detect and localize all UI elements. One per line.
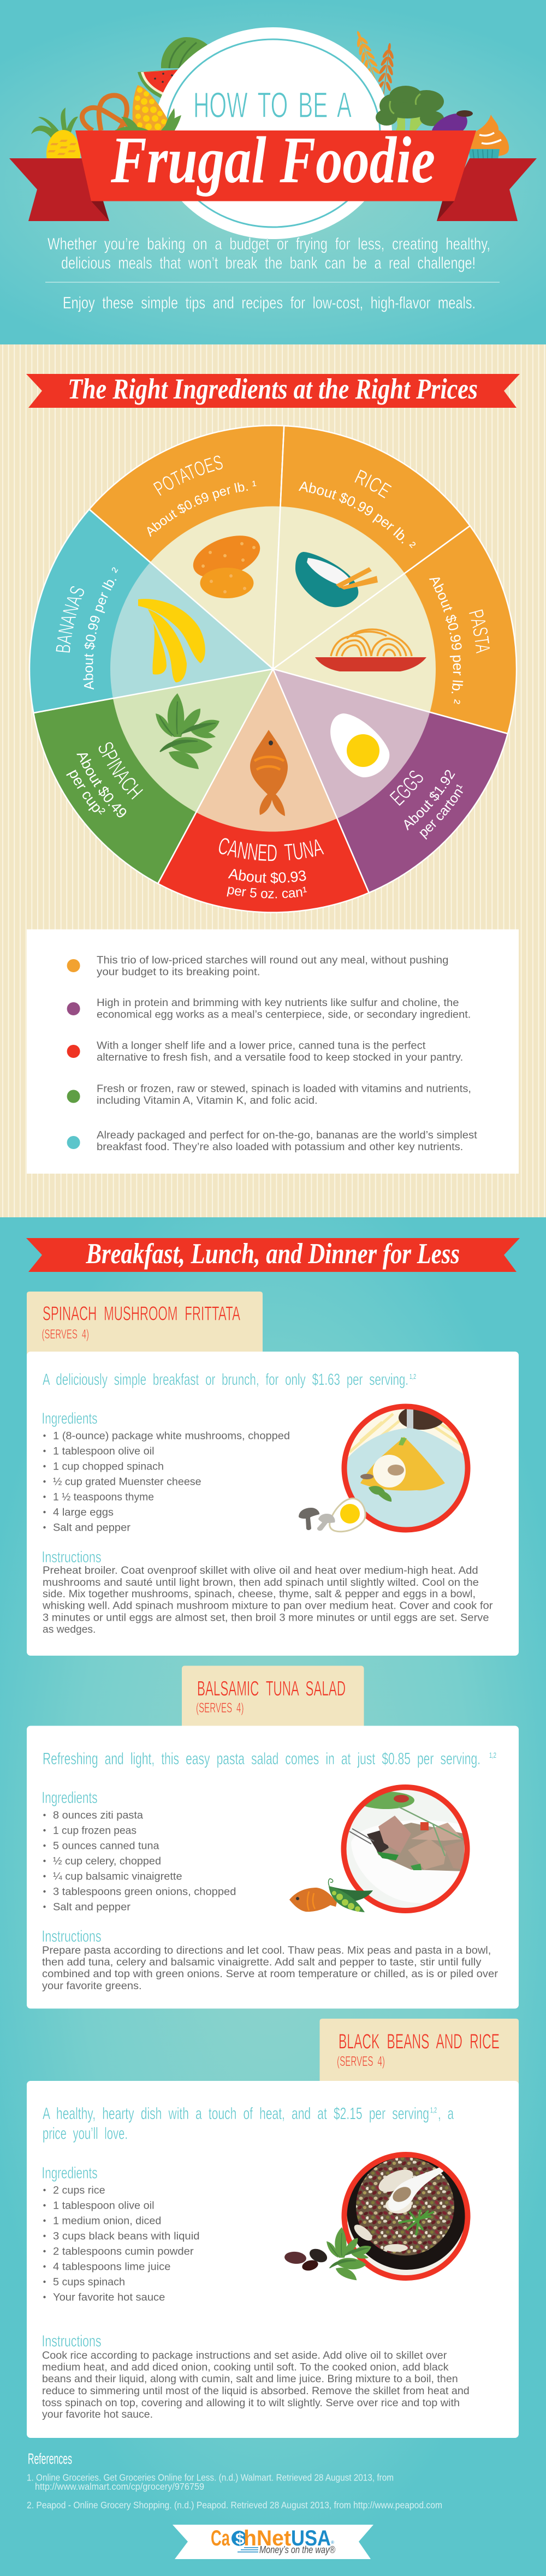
slice: pasta: PASTA <box>468 609 490 654</box>
references: http://www.walmart.com/cp/grocery/976759 <box>35 2481 204 2492</box>
ingredients <box>41 1789 236 1913</box>
icon: fish <box>289 1888 337 1912</box>
references <box>27 2450 442 2510</box>
ingredients: 1 ½ teaspoons thyme <box>53 1491 154 1503</box>
banner: frugal foodie ribbon <box>9 123 537 221</box>
photo: tuna salad <box>341 1782 475 1916</box>
instructions: Preheat broiler. Coat ovenproof skillet with olive oil and heat over medium-high heat. Add <box>43 1565 478 1576</box>
recipe tab <box>182 1666 364 1730</box>
logo ribbon: cashnetusa: Ca <box>211 2526 230 2550</box>
ingredients: 1 (8-ounce) package white mushrooms, chopped <box>53 1430 290 1442</box>
title dome <box>154 27 392 239</box>
ingredients <box>41 2164 200 2304</box>
note: bananas: breakfast food. They’re also loaded with potassium and other key nutrients. <box>97 1141 463 1153</box>
recipe tab: (SERVES 4) <box>196 1700 244 1716</box>
instructions: Instructions <box>41 2332 102 2351</box>
slice: bananas <box>28 509 272 714</box>
slice: spinach: About $0.49 <box>76 753 127 818</box>
icon: black beans <box>284 2246 329 2272</box>
intro text <box>45 234 500 312</box>
logo ribbon: cashnetusa: Money’s on the way® <box>259 2544 336 2555</box>
note: spinach <box>67 1083 471 1106</box>
instructions <box>41 1927 498 1992</box>
instructions <box>41 2332 470 2420</box>
recipe tab: (SERVES 4) <box>41 1327 89 1342</box>
photo: beans and rice <box>341 2150 472 2282</box>
instructions: 3 minutes or until eggs are almost set, then broil 3 more minutes or until eggs are set. Serve <box>43 1613 489 1623</box>
slice: eggs: EGGS <box>390 770 423 806</box>
recipe card <box>27 1352 519 1656</box>
ingredients: 5 ounces canned tuna <box>53 1841 159 1852</box>
ingredients: 3 cups black beans with liquid <box>53 2230 200 2242</box>
recipe tab <box>320 2019 519 2085</box>
icon: corn <box>115 85 181 130</box>
ingredients: ¼ cup balsamic vinaigrette <box>53 1871 182 1882</box>
instructions: Cook rice according to package instructions and set aside. Add olive oil to skillet over <box>42 2350 447 2361</box>
recipe tab: SPINACH MUSHROOM FRITTATA <box>43 1302 240 1324</box>
slice: rice: About $0.99 per lb. ² <box>298 481 416 548</box>
instructions: whisking well. Add spinach mushroom mixture to pan over medium heat. Cover and cook for <box>42 1601 493 1611</box>
instructions: Instructions <box>41 1927 102 1946</box>
instructions: then add tuna, celery and balsamic vinaigrette. Add salt and pepper to taste, stir until fully <box>42 1956 482 1968</box>
ingredients <box>41 1410 290 1534</box>
note: spinach: Fresh or frozen, raw or stewed, spinach is loaded with vitamins and nutrients, <box>97 1083 471 1095</box>
references: References <box>28 2450 72 2467</box>
ingredients: 2 cups rice <box>53 2185 105 2197</box>
tagline: 1,2 <box>430 2105 437 2114</box>
ingredients: 1 medium onion, diced <box>53 2215 161 2227</box>
note: starches <box>67 955 449 978</box>
ingredients: Ingredients <box>41 2164 97 2182</box>
slice: pasta: About $0.99 per lb. ² <box>429 578 463 704</box>
icon: eggplant <box>432 110 473 130</box>
recipe: black beans and rice <box>27 2019 519 2438</box>
ingredients: ½ cup celery, chopped <box>53 1856 161 1867</box>
references: 2. Peapod - Online Grocery Shopping. (n.d.) Peapod. Retrieved 28 August 2013, from http://www.peapod.com <box>27 2500 442 2510</box>
recipe tab <box>27 1292 263 1356</box>
note: bananas <box>67 1130 478 1153</box>
ingredients: ½ cup grated Muenster cheese <box>53 1476 201 1488</box>
icon: egg <box>330 1498 365 1532</box>
ingredients: 8 ounces ziti pasta <box>53 1810 143 1821</box>
note: tuna: With a longer shelf life and a lower price, canned tuna is the perfect <box>97 1040 426 1051</box>
instructions: side. Mix together mushrooms, spinach, cheese, thyme, salt & pepper and eggs in a bowl, <box>43 1589 476 1600</box>
slice: spinach <box>33 670 273 884</box>
instructions: beans and their liquid, along with cumin, salt and lime juice. Bring mixture to a boil, then <box>42 2373 458 2385</box>
icon: pretzel <box>82 96 131 130</box>
slice: pasta <box>274 525 518 734</box>
logo ribbon: cashnetusa: USA <box>291 2526 331 2550</box>
icon: cupcake <box>465 115 509 159</box>
ingredients: 2 tablespoons cumin powder <box>53 2246 194 2258</box>
note: tuna: alternative to fresh fish, and a versatile food to keep stocked in your pantry. <box>97 1052 463 1063</box>
ingredients: Salt and pepper <box>53 1902 131 1913</box>
slice: bananas: About $0.99 per lb. ² <box>83 567 118 690</box>
instructions: Instructions <box>41 1549 102 1566</box>
ingredients: Your favorite hot sauce <box>53 2292 165 2304</box>
ingredients: 1 tablespoon olive oil <box>53 1445 154 1457</box>
slice: spinach: SPINACH <box>98 742 143 800</box>
recipes background <box>0 1217 546 2576</box>
icon: watermelon slice <box>138 69 186 99</box>
note: starches: your budget to its breaking point. <box>97 966 260 978</box>
ingredients: 1 cup chopped spinach <box>53 1461 164 1473</box>
note: starches: This trio of low-priced starches will round out any meal, without pushing <box>97 955 449 966</box>
note: bananas: Already packaged and perfect for on-the-go, bananas are the world’s simplest <box>97 1130 478 1141</box>
instructions: toss spinach on top, covering and allowing it to wilt slightly. Serve over rice and top with <box>42 2397 460 2409</box>
slice: spinach: per cup² <box>66 770 105 814</box>
slice: potatoes <box>88 425 285 666</box>
note: tuna <box>67 1040 463 1063</box>
instructions <box>41 1549 493 1635</box>
tagline: , a <box>438 2104 454 2123</box>
logo ribbon: cashnetusa <box>173 2525 373 2559</box>
recipe tab: (SERVES 4) <box>337 2054 385 2069</box>
instructions: mushrooms and sauté until light brown, then add spinach until slightly wilted. Cool on the <box>43 1577 479 1589</box>
ingredients: 1 tablespoon olive oil <box>53 2200 154 2212</box>
note: eggs <box>67 997 471 1021</box>
tagline: 1,2 <box>410 1372 416 1381</box>
recipe: balsamic tuna salad <box>27 1666 519 2009</box>
heading: how to be a: HOW TO BE A <box>193 85 352 125</box>
instructions: your favorite hot sauce. <box>42 2409 153 2420</box>
pie chart: ingredients <box>28 425 518 913</box>
slice: canned tuna <box>157 670 369 913</box>
logo ribbon: cashnetusa: ® <box>331 2540 334 2545</box>
instructions: reduce to simmering until most of the liquid is absorbed. Remove the skillet from heat and <box>42 2385 470 2397</box>
panel: ingredient notes <box>27 929 519 1174</box>
instructions: combined and top with green onions. Serve at room temperature or chilled, as is or piled over <box>42 1968 498 1980</box>
recipe card <box>27 1726 519 2009</box>
ingredients: Salt and pepper <box>53 1522 131 1534</box>
icon: pineapple <box>31 108 80 178</box>
instructions: medium heat, and add diced onion, cooking until soft. To the cooked onion, add black <box>42 2361 449 2373</box>
ingredients: 4 tablespoons lime juice <box>53 2261 170 2273</box>
ingredients: Ingredients <box>41 1789 97 1807</box>
slice: potatoes: About $0.69 per lb. ¹ <box>147 480 257 537</box>
slice: eggs <box>274 669 509 894</box>
banner: breakfast lunch dinner: Breakfast, Lunch, and Dinner for Less <box>86 1238 460 1270</box>
photo: frittata <box>341 1403 475 1534</box>
icon: pea pod <box>329 1879 373 1912</box>
slice: potatoes: POTATOES <box>153 455 223 496</box>
recipe tab: BALSAMIC TUNA SALAD <box>197 1677 346 1700</box>
tagline <box>43 2104 454 2143</box>
striped ingredients background <box>0 344 546 1217</box>
ingredients: 3 tablespoons green onions, chopped <box>53 1887 236 1897</box>
instructions: your favorite greens. <box>42 1980 142 1992</box>
slice: canned tuna: About $0.93 <box>228 869 306 884</box>
recipe: spinach mushroom frittata <box>27 1292 519 1656</box>
banner: the right ingredients: The Right Ingredients at the Right Prices <box>68 373 478 405</box>
instructions: Prepare pasta according to directions and let cool. Thaw peas. Mix peas and pasta in a bowl, <box>42 1945 491 1956</box>
note: eggs: economical egg works as a meal’s centerpiece, side, or secondary ingredient. <box>97 1009 471 1021</box>
tagline: 1,2 <box>489 1751 496 1759</box>
slice: eggs: About $1.92 <box>404 770 455 831</box>
slice: bananas: BANANAS <box>56 586 84 653</box>
slice: rice: RICE <box>354 469 392 498</box>
header background <box>0 0 546 344</box>
note: eggs: High in protein and brimming with key nutrients like sulfur and choline, the <box>97 997 459 1009</box>
icon: broccoli <box>376 86 444 130</box>
icon: wheat <box>350 28 397 98</box>
tagline: price you’ll love. <box>43 2123 128 2143</box>
ingredients: 5 cups spinach <box>53 2276 125 2288</box>
logo ribbon: cashnetusa: hNet <box>244 2526 291 2550</box>
icon: spinach leaf <box>327 2227 371 2280</box>
ingredients: 1 cup frozen peas <box>53 1825 136 1836</box>
logo ribbon: cashnetusa: $ <box>235 2530 245 2548</box>
ingredients: 4 large eggs <box>53 1507 114 1519</box>
recipe card <box>27 2081 519 2438</box>
slice: canned tuna: CANNED TUNA <box>218 838 324 861</box>
references: 1. Online Groceries. Get Groceries Online for Less. (n.d.) Walmart. Retrieved 28 August 2013, from <box>27 2472 394 2483</box>
instructions: as wedges. <box>43 1624 96 1635</box>
slice: eggs: per carton¹ <box>419 784 463 840</box>
slice: canned tuna: per 5 oz. can¹ <box>227 887 307 899</box>
ingredients: Ingredients <box>41 1410 97 1427</box>
icon: watermelon half <box>161 37 211 68</box>
title: Frugal Foodie <box>110 123 435 197</box>
slice: rice <box>272 425 471 667</box>
icon: mushrooms <box>299 1508 335 1531</box>
note: spinach: including Vitamin A, Vitamin K, and folic acid. <box>97 1095 318 1106</box>
